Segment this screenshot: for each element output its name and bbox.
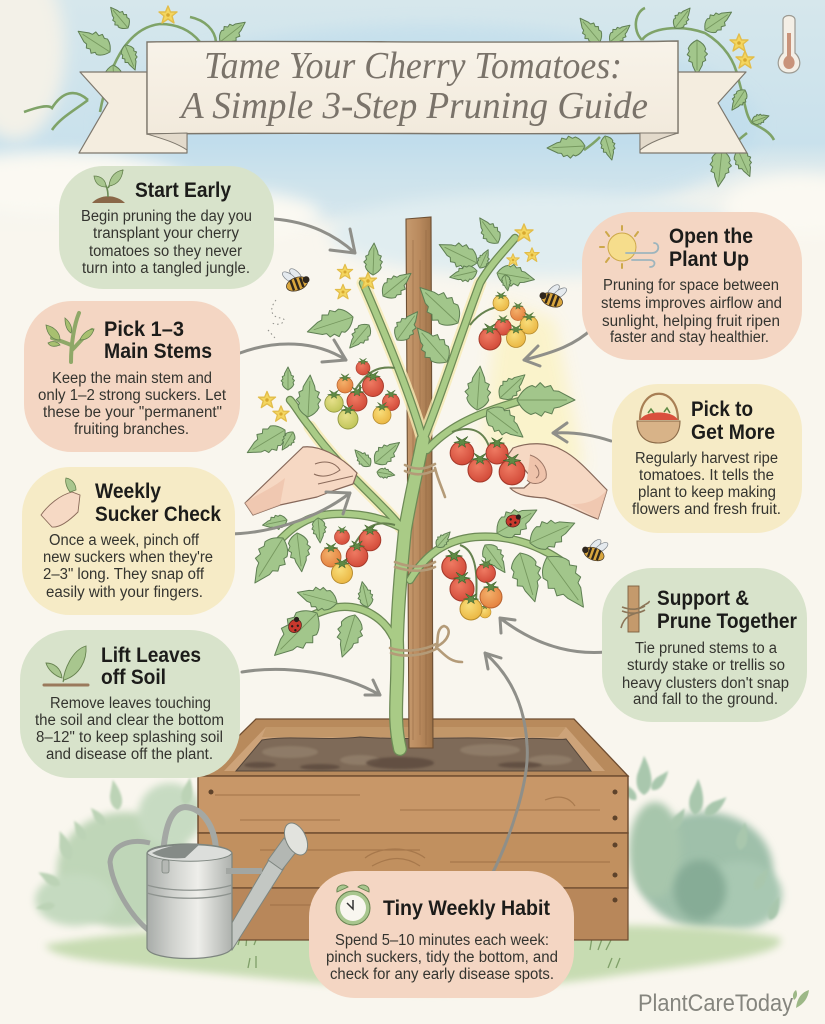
yellow tomato flowers bbox=[258, 224, 539, 421]
text bbox=[601, 225, 782, 346]
icon: leaf on soil bbox=[44, 646, 88, 685]
icon: seedling bbox=[92, 170, 125, 203]
text bbox=[35, 644, 224, 763]
panel: pick to get more bbox=[612, 384, 802, 533]
vine: top left bbox=[24, 2, 251, 130]
text: transplant your cherry bbox=[93, 225, 239, 242]
text: Prune Together bbox=[657, 610, 797, 633]
tomato cluster: lower right bbox=[442, 545, 502, 620]
raised wooden planter box bbox=[198, 719, 628, 940]
watering can bbox=[110, 807, 312, 958]
grass patch bbox=[45, 925, 781, 992]
arrow: pick to get more bbox=[553, 423, 611, 442]
text: and disease off the plant. bbox=[46, 746, 213, 763]
icon: thermometer bbox=[778, 16, 800, 73]
arrow: main stems bbox=[240, 340, 346, 362]
right ribbon tail bbox=[640, 72, 747, 153]
text: 8–12" to keep splashing soil bbox=[36, 729, 223, 746]
tomato plant leaves bbox=[241, 213, 598, 668]
text bbox=[632, 398, 781, 518]
icon: alarm clock bbox=[336, 885, 370, 925]
right foliage bush bbox=[618, 756, 783, 929]
banner panel bbox=[147, 41, 678, 134]
arrow: start early to plant bbox=[274, 219, 355, 253]
left ribbon tail bbox=[79, 72, 187, 153]
panel: lift leaves off soil bbox=[20, 630, 240, 778]
icon: branching stem bbox=[46, 313, 94, 362]
yellow sun glow behind plant bbox=[480, 300, 585, 470]
text: Weekly bbox=[95, 480, 161, 503]
arrow: open the plant up bbox=[524, 328, 593, 366]
text: Open the bbox=[669, 225, 753, 248]
arrow: weekly habit bbox=[485, 653, 527, 880]
tomato plant stems bbox=[280, 238, 560, 749]
panel: pick main stems bbox=[24, 301, 240, 452]
right hand picking tomato bbox=[503, 444, 607, 519]
text: check for any early disease spots. bbox=[330, 966, 554, 983]
icon: hand with sucker bbox=[41, 478, 80, 527]
text: Begin pruning the day you bbox=[81, 208, 252, 225]
arrows bbox=[222, 219, 611, 880]
text: tomatoes. It tells the bbox=[639, 467, 774, 484]
tomato cluster: lower left bbox=[321, 523, 395, 584]
panel: weekly sucker check bbox=[22, 467, 235, 615]
text: Main Stems bbox=[104, 340, 212, 363]
insects bbox=[268, 263, 611, 635]
icon: sun and breeze bbox=[600, 226, 658, 268]
left hand pinching sucker bbox=[245, 447, 357, 515]
text: Sucker Check bbox=[95, 503, 221, 526]
tomato cluster: being picked bbox=[450, 429, 525, 485]
text: Once a week, pinch off bbox=[49, 532, 200, 549]
arrow: lift leaves bbox=[242, 669, 380, 695]
text: Lift Leaves bbox=[101, 644, 201, 667]
title text: Tame Your Cherry Tomatoes: bbox=[204, 45, 622, 87]
text: only 1–2 strong suckers. Let bbox=[38, 387, 227, 404]
text: flowers and fresh fruit. bbox=[632, 501, 781, 518]
arrow: sucker check bbox=[222, 492, 350, 534]
text: tomatoes so they never bbox=[89, 243, 242, 260]
text: Tie pruned stems to a bbox=[635, 640, 777, 657]
panel: start early bbox=[59, 166, 274, 289]
text: the soil and clear the bottom bbox=[35, 712, 224, 729]
wooden support stake bbox=[406, 217, 433, 748]
panel: support and prune together bbox=[602, 568, 807, 722]
icon: tomato basket bbox=[637, 394, 680, 443]
text: Keep the main stem and bbox=[52, 370, 212, 387]
text: Start Early bbox=[135, 179, 231, 202]
text: sturdy stake or trellis so bbox=[627, 657, 785, 674]
vine: top right bbox=[546, 4, 774, 188]
text: off Soil bbox=[101, 666, 166, 689]
watermark: PlantCareToday: PlantCareToday bbox=[638, 990, 793, 1017]
text bbox=[326, 897, 558, 983]
text: and fall to the ground. bbox=[633, 691, 778, 708]
title text: A Simple 3-Step Pruning Guide bbox=[178, 85, 648, 127]
title banner bbox=[24, 2, 774, 188]
text: Pruning for space between bbox=[603, 277, 779, 294]
text: Get More bbox=[691, 421, 775, 444]
text: Pick to bbox=[691, 398, 753, 421]
arrow: support bbox=[500, 618, 606, 653]
text: plant to keep making bbox=[638, 484, 776, 501]
text: faster and stay healthier. bbox=[610, 329, 769, 346]
text: pinch suckers, tidy the bottom, and bbox=[326, 949, 558, 966]
text: turn into a tangled jungle. bbox=[82, 260, 250, 277]
text: Support & bbox=[657, 587, 749, 610]
text: sunlight, helping fruit ripen bbox=[602, 313, 780, 330]
text: Remove leaves touching bbox=[50, 695, 211, 712]
tomato cluster: upper right bbox=[470, 292, 538, 350]
text: Pick 1–3 bbox=[104, 318, 184, 341]
text: stems improves airflow and bbox=[601, 295, 782, 312]
icon: tied stake bbox=[621, 586, 649, 632]
text bbox=[81, 179, 252, 277]
text: fruiting branches. bbox=[74, 421, 189, 438]
text: Plant Up bbox=[669, 248, 749, 271]
text: these be your "permanent" bbox=[43, 404, 222, 421]
panel: tiny weekly habit bbox=[309, 871, 574, 998]
text: Tiny Weekly Habit bbox=[383, 897, 550, 920]
text: heavy clusters don't snap bbox=[622, 675, 789, 692]
text: new suckers when they're bbox=[43, 549, 213, 566]
twine ties bbox=[390, 464, 462, 662]
text: 2–3" long. They snap off bbox=[43, 566, 205, 583]
text bbox=[38, 318, 227, 438]
text bbox=[622, 587, 797, 708]
tomato cluster: upper left bbox=[325, 358, 400, 429]
text: easily with your fingers. bbox=[46, 584, 203, 601]
text: Regularly harvest ripe bbox=[635, 450, 778, 467]
text bbox=[43, 480, 221, 601]
panel: open the plant up bbox=[582, 212, 802, 360]
left foliage bush bbox=[35, 776, 202, 928]
text: Spend 5–10 minutes each week: bbox=[335, 932, 549, 949]
soil bbox=[236, 737, 591, 771]
title text bbox=[178, 45, 648, 127]
